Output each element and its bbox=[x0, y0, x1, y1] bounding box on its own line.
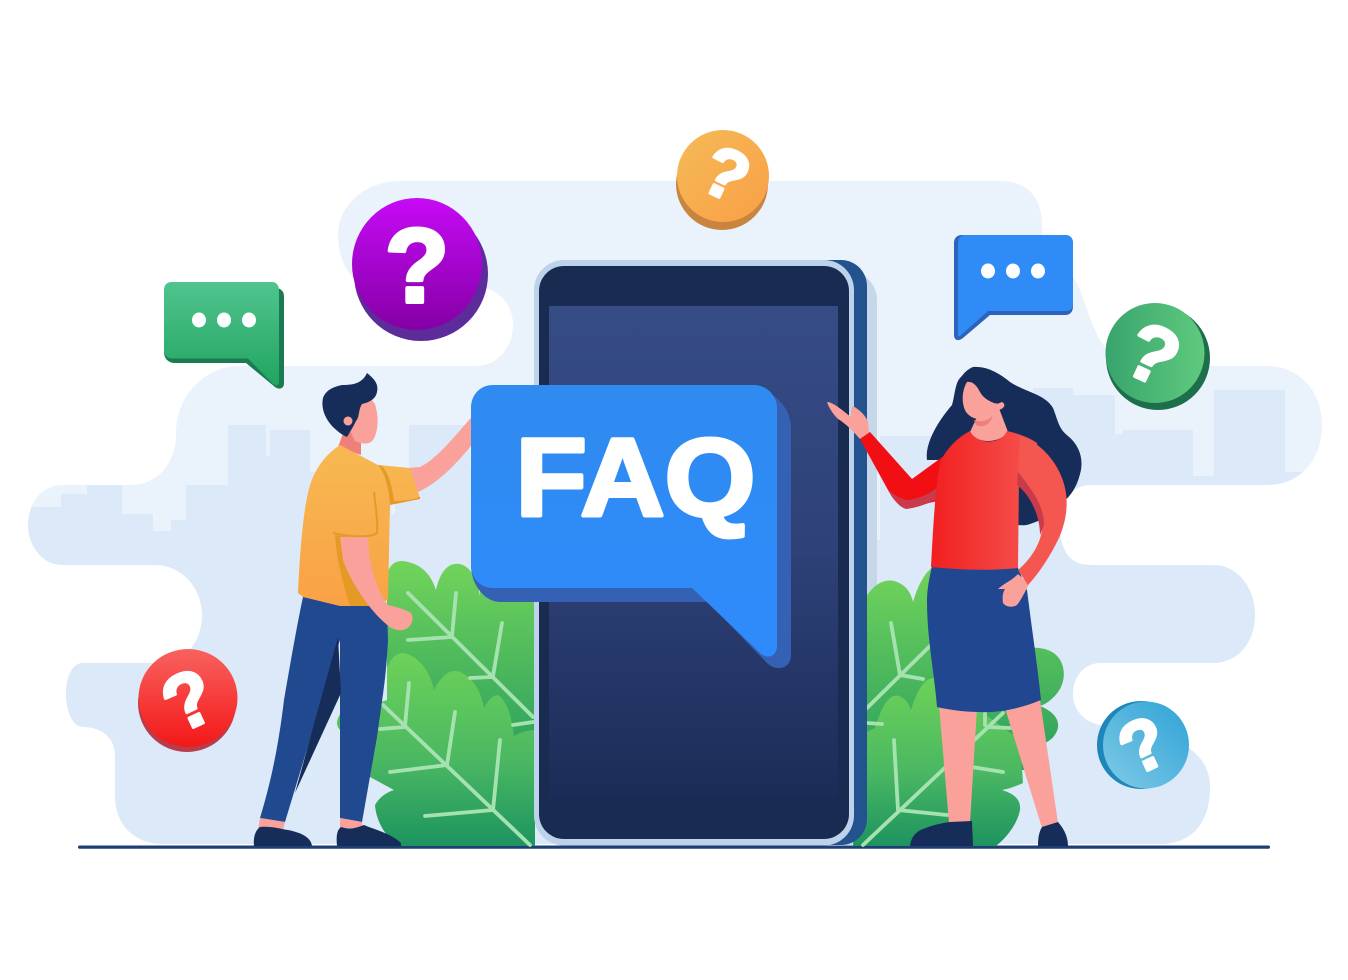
man: shirt bbox=[298, 445, 420, 606]
man: sleeve edge bbox=[333, 492, 377, 536]
woman: raised hand bbox=[827, 402, 869, 439]
woman: sweater sleeve shadow bbox=[1017, 472, 1044, 535]
question badge: purple: ? bbox=[385, 208, 449, 325]
question badge: purple bbox=[352, 198, 488, 341]
woman: raised arm bbox=[860, 432, 945, 508]
woman: shoes bbox=[910, 821, 1068, 846]
chat bubble: blue bbox=[954, 235, 1073, 340]
woman bbox=[827, 367, 1082, 846]
woman: hair bbox=[927, 367, 1082, 525]
woman: neck shadow bbox=[974, 415, 993, 426]
background: cloud blob with city skyline bbox=[0, 170, 1348, 860]
man: ear bbox=[344, 416, 352, 426]
man: raised arm bbox=[408, 413, 475, 492]
typing dots bbox=[981, 264, 1045, 278]
question badge: green: ? bbox=[1112, 304, 1194, 405]
question badge: red: ? bbox=[148, 650, 229, 750]
man: hair bbox=[322, 373, 377, 437]
phone bbox=[534, 260, 867, 846]
leaf veins: left bush bbox=[380, 593, 533, 845]
bubble shadow bbox=[471, 390, 791, 668]
phone bezel bbox=[534, 260, 854, 846]
phone screen bbox=[549, 306, 838, 798]
woman: neck bbox=[970, 403, 1008, 441]
woman: hip hand bbox=[998, 574, 1029, 607]
phone back edge bbox=[700, 260, 867, 845]
man: lower arm and hand bbox=[340, 537, 413, 630]
woman: face bbox=[963, 382, 1004, 419]
woman: sweater sleeve bbox=[1018, 436, 1067, 585]
FAQ label: FAQ bbox=[516, 416, 756, 540]
FAQ speech bubble bbox=[471, 385, 791, 668]
typing dots bbox=[192, 312, 256, 328]
man: neck bbox=[338, 428, 361, 455]
bubble face bbox=[471, 385, 777, 657]
woman: skirt bbox=[927, 566, 1041, 712]
man bbox=[254, 373, 475, 846]
question badge: blue: ? bbox=[1107, 700, 1180, 791]
woman: legs bbox=[939, 700, 1058, 828]
question badge: orange: ? bbox=[690, 130, 762, 218]
chat bubble: green bbox=[164, 282, 284, 389]
plant: right bush bbox=[853, 566, 1064, 846]
man: back leg shadow bbox=[295, 637, 341, 793]
man: trousers bbox=[260, 597, 388, 822]
man: shirt shadows bbox=[335, 465, 420, 606]
woman: sweater body bbox=[931, 431, 1040, 570]
phone body bbox=[539, 266, 849, 839]
phone soft shadow bbox=[840, 272, 877, 845]
man: head bbox=[347, 398, 378, 444]
plant: left bush bbox=[337, 561, 535, 846]
leaf veins: right bush bbox=[863, 623, 1010, 845]
man: shoes and ankles bbox=[258, 818, 363, 830]
ground line bbox=[78, 846, 1270, 849]
question badge: orange bbox=[676, 130, 769, 230]
